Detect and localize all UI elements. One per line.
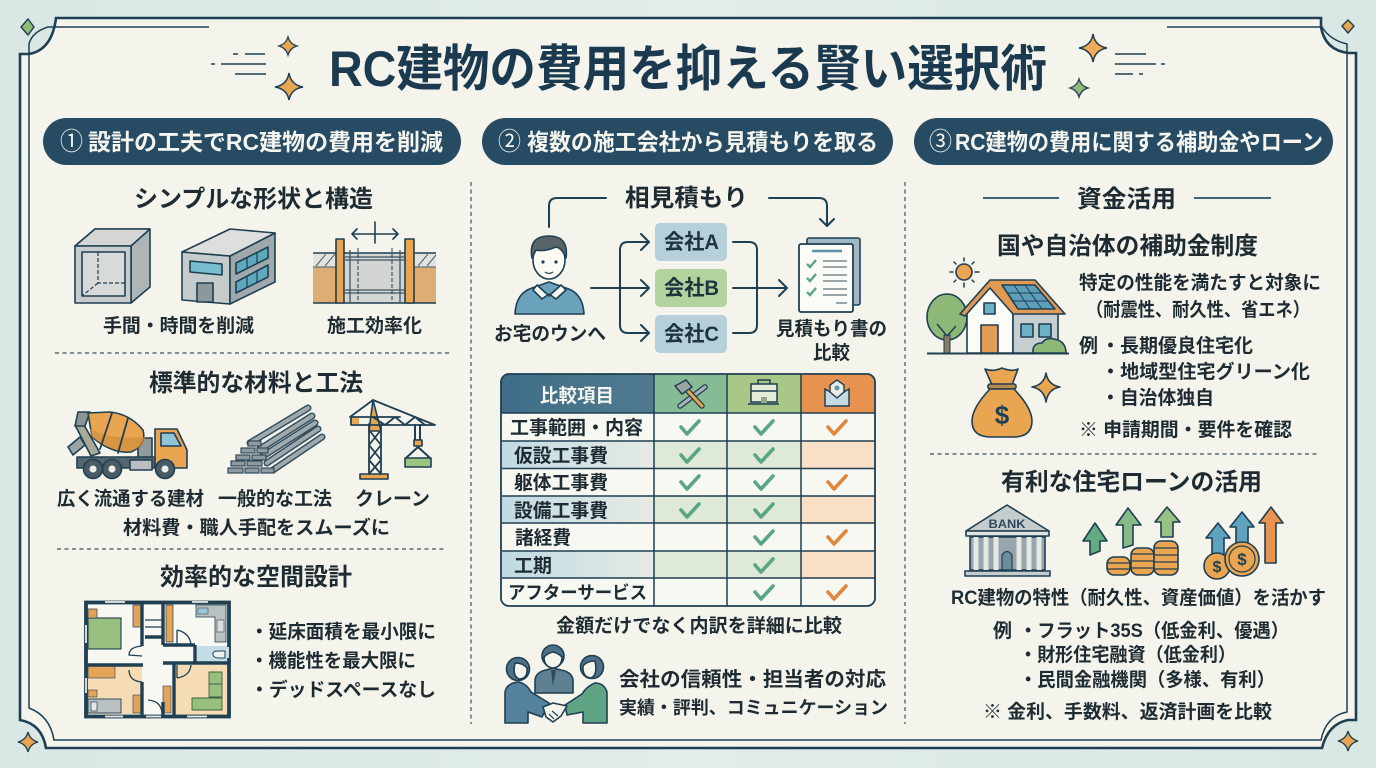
bullet list: space design: ・機能性を最大限に <box>250 650 416 672</box>
note: check requirements: ※ 申請期間・要件を確認 <box>1079 419 1292 441</box>
company B: 会社B <box>664 277 719 300</box>
list: subsidy examples: ・地域型住宅グリーン化 <box>1101 360 1310 383</box>
icon: steel bars <box>228 408 322 473</box>
table rows: 工事範囲・内容 <box>510 417 643 439</box>
text: company reliability <box>619 668 888 718</box>
table rows: 仮設工事費 <box>514 445 608 467</box>
icon: floor plan <box>85 601 230 718</box>
table rows: 工期 <box>514 555 552 577</box>
icon: quote documents <box>799 238 860 312</box>
comparison table <box>501 374 875 606</box>
icon: rising funds <box>1204 507 1283 579</box>
list: loan examples <box>993 620 1289 691</box>
heading pill 3: ③ <box>929 128 952 156</box>
text: eligibility: 特定の性能を満たすと対象に <box>1079 272 1321 294</box>
text: company reliability: 実績・評判、コミュニケーション <box>619 698 888 718</box>
icon: rising coins <box>1083 507 1180 575</box>
list: subsidy examples <box>1079 335 1310 409</box>
icon: bank <box>965 505 1050 576</box>
subheading: comparison quotes: 相見積もり <box>625 185 748 212</box>
text: eligibility <box>1079 272 1321 321</box>
note: smooth arrangement: 材料費・職人手配をスムーズに <box>123 516 390 539</box>
company B <box>655 269 727 307</box>
flow arrows <box>549 198 834 341</box>
note: compare rates: ※ 金利、手数料、返済計画を比較 <box>983 700 1272 723</box>
caption: compare quotes: 見積もり書の <box>776 317 887 340</box>
table rows: アフターサービス <box>508 582 647 603</box>
icon: rising funds: $ <box>1237 550 1247 569</box>
icon: construction section <box>313 222 436 303</box>
caption: compare quotes: 比較 <box>813 342 850 364</box>
heading pill 3: RC建物の費用に関する補助金やローン <box>955 129 1323 155</box>
icon: tower crane <box>350 400 435 479</box>
icon: money bag: $ <box>995 400 1010 430</box>
panel: funding <box>914 118 1333 723</box>
icon: simple building <box>182 229 275 304</box>
list: subsidy examples: ・長期優良住宅化 <box>1101 335 1253 357</box>
subheading: subsidies: 国や自治体の補助金制度 <box>997 233 1258 260</box>
list: subsidy examples: ・自治体独自 <box>1101 387 1214 409</box>
text: eligibility: （耐震性、耐久性、省エネ） <box>1086 299 1310 321</box>
caption: efficiency: 施工効率化 <box>327 315 422 337</box>
text: company reliability: 会社の信頼性・担当者の対応 <box>619 668 886 691</box>
subheading: standard materials: 標準的な材料と工法 <box>149 370 363 397</box>
caption: common methods: 一般的な工法 <box>218 488 332 510</box>
icon: solar house <box>927 258 1069 354</box>
caption: common materials: 広く流通する建材 <box>57 488 204 510</box>
table rows <box>502 417 874 603</box>
icon: rising funds: $ <box>1213 559 1222 576</box>
panel: design <box>43 118 461 718</box>
bullet list: space design <box>250 621 436 701</box>
icon: handshake <box>505 645 607 723</box>
list: loan examples: ・フラット35S（低金利、優遇） <box>1019 620 1289 642</box>
company A <box>655 223 727 261</box>
column dividers <box>471 182 905 724</box>
table checks <box>681 421 846 599</box>
heading pill 2: 複数の施工会社から見積もりを取る <box>527 129 878 155</box>
icon: money bag <box>972 368 1060 437</box>
company A: 会社A <box>664 231 719 254</box>
icon: mixer truck <box>68 412 187 478</box>
note: compare breakdown: 金額だけでなく内訳を詳細に比較 <box>556 614 842 637</box>
table rows: 諸経費 <box>515 527 571 549</box>
icon: bank: BANK <box>988 517 1026 531</box>
subheading: efficient space: 効率的な空間設計 <box>160 564 352 591</box>
caption: crane: クレーン <box>355 488 430 510</box>
subheading: simple shape: シンプルな形状と構造 <box>134 186 373 213</box>
company C <box>655 315 727 353</box>
subheading: loans: 有利な住宅ローンの活用 <box>1001 469 1262 496</box>
company C: 会社C <box>664 323 719 346</box>
caption: customer: お宅のウンへ <box>494 323 606 345</box>
list: loan examples: ・民間金融機関（多様、有利） <box>1019 669 1275 691</box>
table header: 比較項目 <box>540 385 614 407</box>
icon: concrete box <box>75 229 150 303</box>
text: RC building benefit: RC建物の特性（耐久性、資産価値）を活かす <box>951 587 1326 609</box>
caption: compare quotes <box>776 317 887 364</box>
bullet list: space design: ・延床面積を最小限に <box>250 621 436 643</box>
list: loan examples: 例 <box>993 620 1012 642</box>
heading pill 3 <box>914 118 1333 165</box>
panel: quotes <box>482 118 893 723</box>
heading pill 2 <box>482 118 893 165</box>
caption: reduce labor: 手間・時間を削減 <box>103 314 254 337</box>
list: subsidy examples: 例 <box>1079 335 1098 357</box>
heading pill 1: ① <box>60 128 83 156</box>
title <box>211 34 1165 100</box>
heading pill 2: ② <box>498 128 521 156</box>
table header <box>501 374 875 413</box>
bullet list: space design: ・デッドスペースなし <box>250 678 436 701</box>
heading pill 1: 設計の工夫でRC建物の費用を削減 <box>88 129 443 155</box>
heading pill 1 <box>43 118 461 165</box>
subheading: funding: 資金活用 <box>1077 186 1176 213</box>
table rows: 設備工事費 <box>514 500 608 522</box>
title: RC建物の費用を抑える賢い選択術 <box>329 41 1047 97</box>
icon: person <box>515 236 584 314</box>
list: loan examples: ・財形住宅融資（低金利） <box>1019 644 1236 666</box>
table rows: 躯体工事費 <box>514 472 608 494</box>
